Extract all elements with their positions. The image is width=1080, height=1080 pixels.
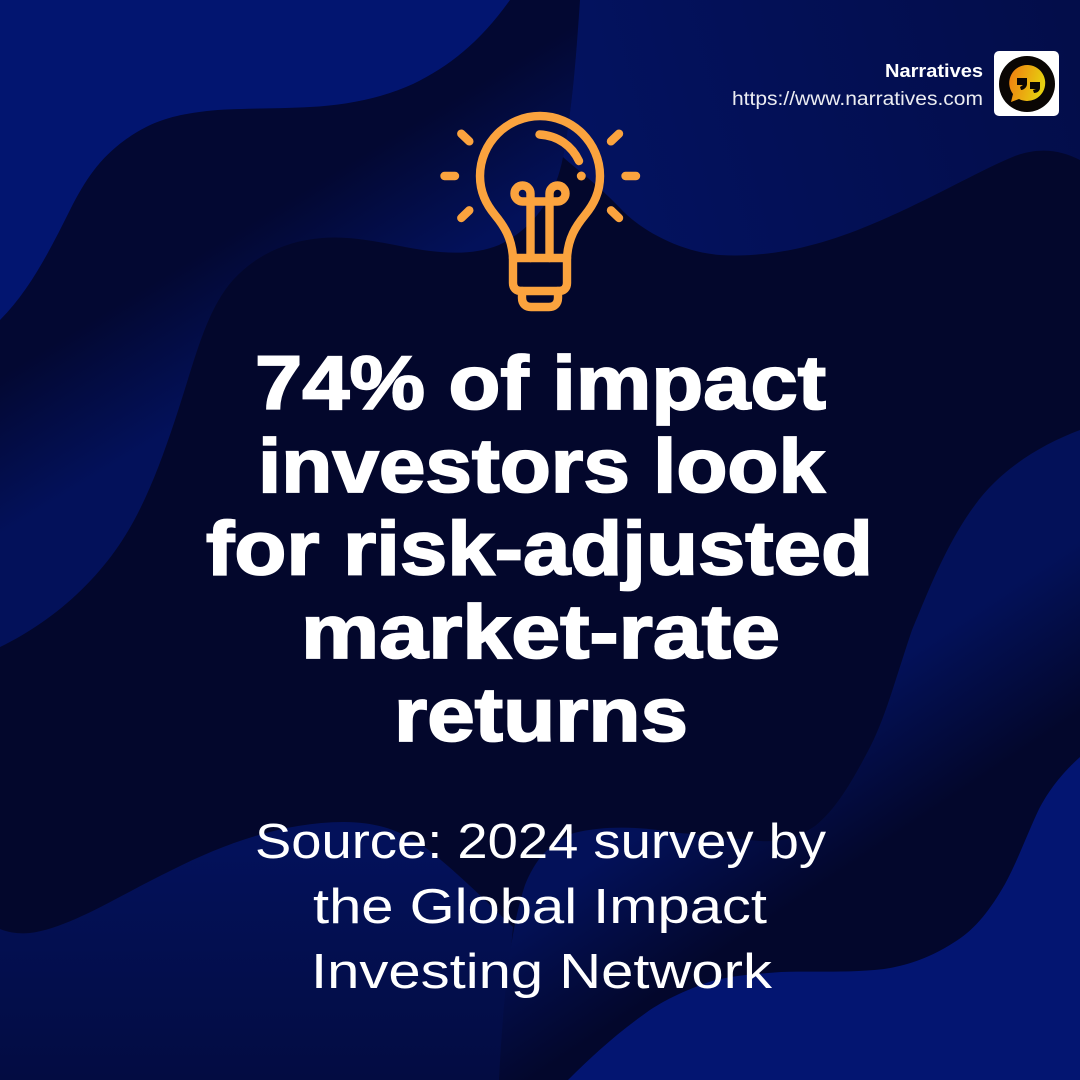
logo speech bubble [1009, 65, 1045, 102]
background: top-right wave [563, 0, 1080, 255]
headline: investors look [258, 424, 826, 509]
headline: 74% of impact [255, 341, 826, 426]
headline: market-rate [301, 590, 780, 675]
background: bottom-right bright wave [568, 757, 1080, 1080]
source note [255, 815, 827, 999]
filament [514, 186, 566, 258]
source note: Source: 2024 survey by [255, 815, 827, 869]
headline: returns [394, 673, 688, 758]
glass highlight dot [577, 172, 586, 180]
icon: light bulb [444, 116, 636, 307]
background: bottom-left wave [0, 822, 513, 1080]
background: bottom-right wave [499, 430, 1080, 1080]
bulb glass [480, 116, 600, 258]
bulb cap [522, 291, 558, 307]
brand name: Narratives [885, 61, 983, 81]
background: top-left bright wave [0, 0, 510, 320]
headline: for risk-adjusted [206, 506, 873, 592]
background: top-left wave band [0, 0, 580, 647]
brand url: https://www.narratives.com [732, 89, 983, 110]
light rays [444, 134, 636, 218]
glass highlight [540, 134, 579, 161]
logo quote marks [1017, 78, 1040, 93]
source note: the Global Impact [313, 880, 767, 934]
logo [994, 51, 1059, 116]
headline [206, 341, 873, 758]
bulb base [513, 258, 567, 291]
source note: Investing Network [311, 945, 773, 999]
